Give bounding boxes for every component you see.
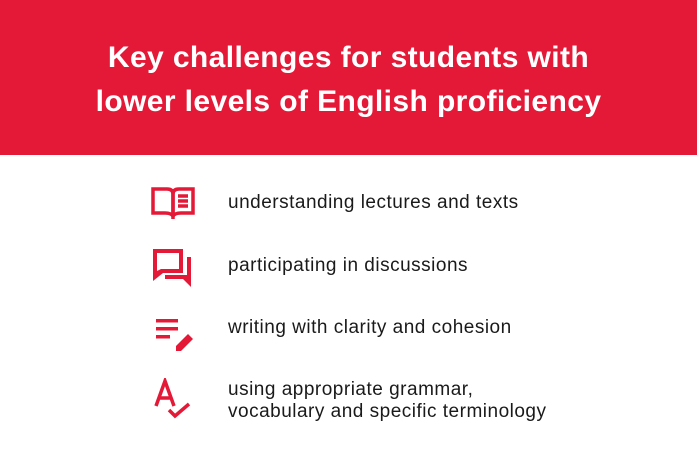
title: Key challenges for students with [108, 41, 589, 74]
icon: chat [153, 249, 191, 287]
item 3 text: writing with clarity and cohesion [228, 317, 512, 338]
header band [0, 0, 697, 155]
item 4 text: using appropriate grammar, [228, 379, 473, 400]
icon: spellcheck [154, 378, 190, 418]
title: lower levels of English proficiency [96, 85, 601, 118]
item 4 text [228, 379, 546, 422]
icon: writing [156, 319, 193, 351]
icon: book [151, 187, 195, 219]
title [96, 41, 601, 118]
item 2 text: participating in discussions [228, 255, 468, 276]
item 4 text: vocabulary and specific terminology [228, 401, 546, 422]
item 1 text: understanding lectures and texts [228, 192, 519, 213]
